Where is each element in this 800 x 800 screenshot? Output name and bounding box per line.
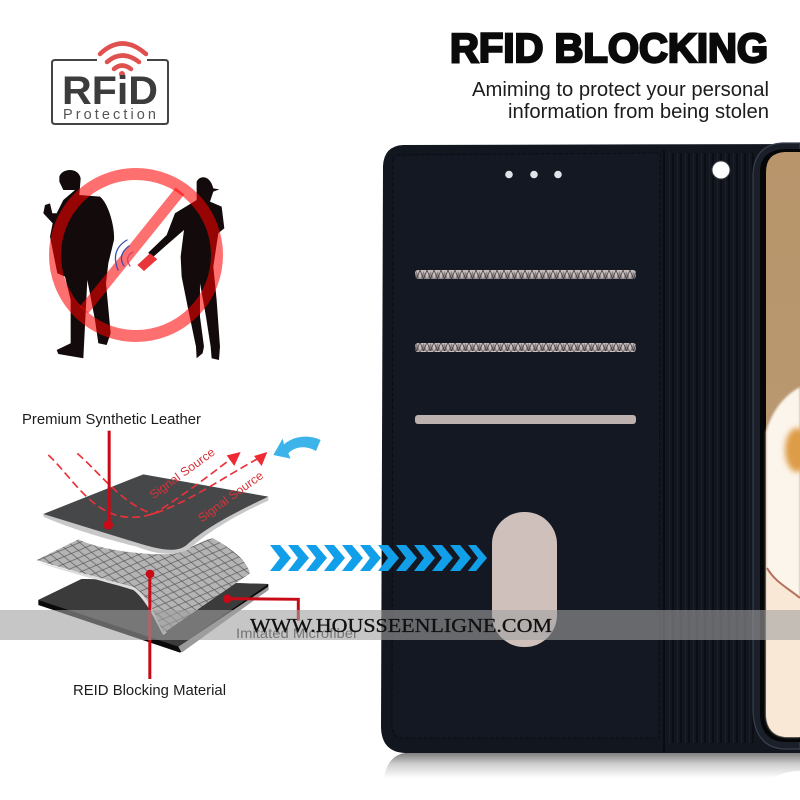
label: microfiber: Imitated Microfiber — [236, 625, 358, 641]
reflection under the case — [384, 753, 800, 799]
RFID protection logo: Protection — [63, 107, 156, 123]
dog on screen — [766, 387, 800, 737]
signal source labels — [147, 445, 266, 525]
label: leather: Premium Synthetic Leather — [22, 412, 201, 428]
ribbed spine — [669, 153, 755, 743]
leader line: leather — [104, 431, 113, 530]
case outer body — [381, 144, 800, 753]
subtitle: Amiming to protect your personal — [472, 78, 769, 101]
vertical fold stitch — [663, 150, 665, 752]
icon: red card — [137, 253, 157, 271]
icon: signal waves — [115, 240, 133, 270]
watermark text: WWW.HOUSSEENLIGNE.COM — [250, 615, 552, 637]
signal source labels: Signal Source — [195, 468, 266, 525]
phone screen — [766, 152, 800, 737]
blue chevron arrows — [270, 545, 487, 571]
label: blocking material: REID Blocking Material — [73, 683, 226, 699]
strap hole — [712, 161, 730, 179]
silhouette: left man — [43, 170, 114, 358]
no-theft illustration — [43, 170, 224, 360]
title: RFID BLOCKING — [450, 25, 768, 71]
arrow heads — [227, 452, 267, 466]
signal source labels: Signal Source — [147, 445, 218, 502]
oval thumb cutout — [492, 512, 557, 647]
RFID protection logo — [52, 44, 168, 124]
silhouette: right thief — [148, 177, 224, 360]
middle layer: blocking mesh — [37, 538, 250, 635]
card slot 3 — [415, 415, 636, 424]
bottom layer: microfiber — [38, 579, 268, 653]
leader line: blocking material — [146, 570, 154, 679]
top layer: synthetic leather — [43, 474, 268, 554]
inner panel stitching — [392, 153, 660, 738]
watermark band — [0, 610, 800, 640]
subtitle — [472, 78, 769, 123]
card slot 2 — [415, 343, 636, 352]
icon: curved blue arrow — [273, 437, 321, 459]
signal paths — [48, 453, 258, 517]
phone bumper — [753, 143, 800, 749]
leader line: microfiber — [223, 594, 298, 621]
RFID protection logo: RFiD — [62, 69, 158, 113]
icon: prohibition sign — [55, 174, 217, 336]
wallet case photo — [381, 143, 800, 799]
card slot 1 — [415, 270, 636, 279]
three top dots — [505, 171, 562, 178]
icon: wifi arcs — [100, 44, 146, 76]
layered material diagram — [37, 431, 321, 679]
subtitle: information from being stolen — [508, 100, 769, 123]
